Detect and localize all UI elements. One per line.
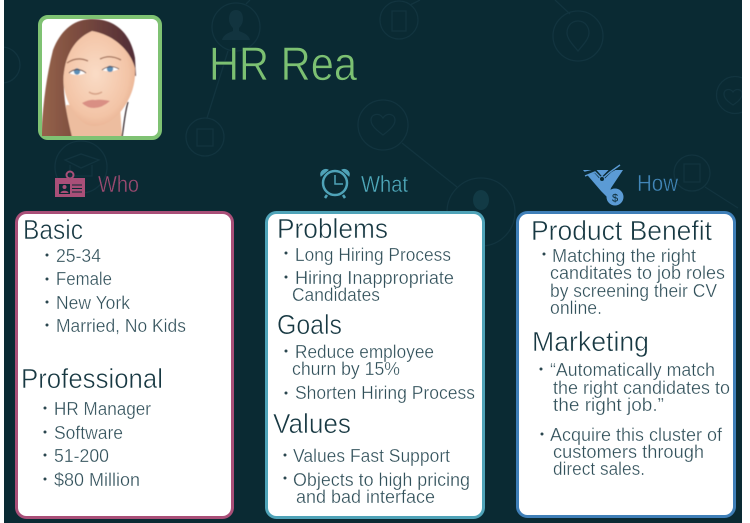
portrait photo [40, 17, 160, 138]
heading: professional: Professional [21, 363, 163, 394]
list: values: and bad interface [296, 486, 435, 507]
list: values: Values Fast Support [293, 445, 450, 466]
panel: what [266, 212, 484, 518]
neck [66, 105, 122, 137]
list: professional [44, 398, 151, 490]
list: basic: Married, No Kids [56, 315, 186, 336]
icon: id badge [55, 172, 85, 197]
icon: alarm clock [321, 169, 349, 198]
eyes [69, 67, 119, 75]
heading: how: How [637, 170, 678, 196]
text: marketing: Acquire this cluster of [550, 424, 723, 445]
text: product benefit: canditates to job roles [550, 262, 725, 283]
list: problems: Long Hiring Process [295, 244, 451, 265]
text: marketing [540, 359, 730, 479]
list: goals [284, 341, 475, 403]
text: marketing: the right job.” [553, 394, 664, 415]
list: basic [46, 245, 186, 336]
list: values: Objects to high pricing [293, 469, 470, 490]
list: professional: HR Manager [54, 398, 151, 419]
list: goals: Shorten Hiring Process [295, 382, 475, 403]
text: product benefit: online. [550, 297, 602, 318]
list: goals: Reduce employee [295, 341, 434, 362]
icon: funnel with dollar [583, 165, 624, 206]
list: basic: Female [56, 268, 112, 289]
list: professional: Software [54, 422, 123, 443]
list: basic: New York [56, 292, 131, 313]
heading: problems: Problems [277, 213, 388, 244]
list: problems: Hiring Inappropriate [295, 267, 454, 288]
title: HR Rea [209, 37, 358, 90]
icon: funnel with dollar: $ [612, 192, 618, 204]
heading: goals: Goals [277, 309, 342, 340]
heading: values: Values [273, 408, 351, 439]
text: marketing: “Automatically match [550, 359, 715, 380]
text: marketing: direct sales. [553, 458, 645, 479]
text: marketing: customers through [553, 441, 704, 462]
list: basic: 25-34 [56, 245, 101, 266]
text: product benefit [542, 245, 725, 318]
heading: who: Who [98, 171, 139, 197]
heading: what: What [361, 171, 409, 197]
text: marketing: the right candidates to [553, 377, 730, 398]
heading: marketing: Marketing [532, 326, 649, 357]
list: problems: Candidates [292, 284, 380, 305]
text: product benefit: by screening their CV [550, 280, 718, 301]
list: problems [284, 244, 454, 305]
text: product benefit: Matching the right [552, 245, 696, 266]
list: professional: $80 Million [54, 469, 140, 490]
panel: who [16, 212, 232, 518]
mouth [82, 100, 110, 108]
heading: basic: Basic [23, 214, 83, 245]
list: values [284, 445, 470, 507]
panel: how [518, 212, 734, 516]
list: professional: 51-200 [54, 445, 109, 466]
face [63, 31, 135, 126]
hair [41, 19, 136, 137]
heading: product benefit: Product Benefit [531, 215, 712, 246]
nose [89, 92, 102, 94]
list: goals: churn by 15% [292, 358, 400, 379]
